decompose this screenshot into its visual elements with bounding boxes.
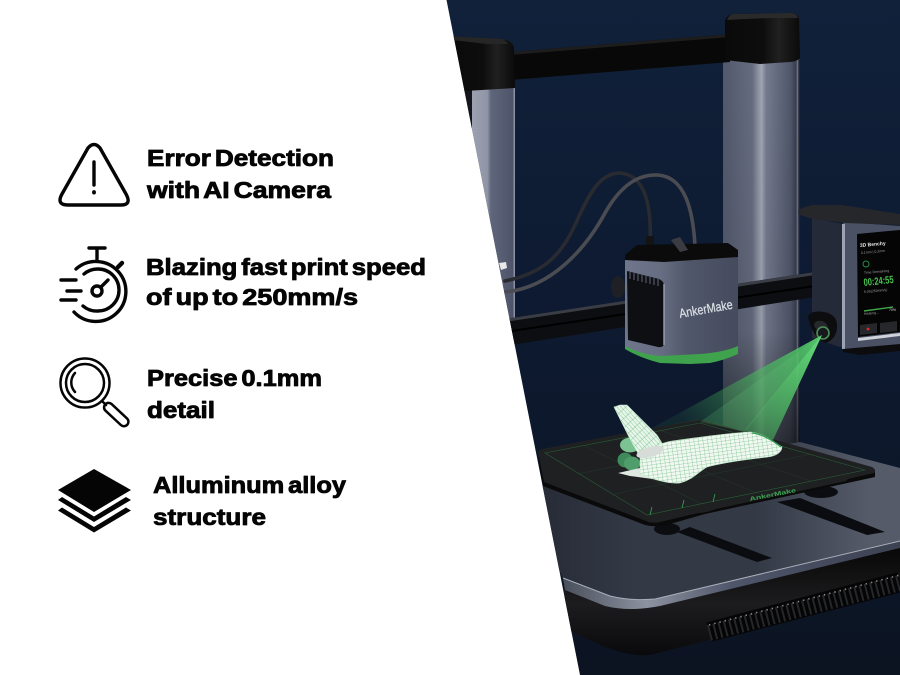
right frame pillar bbox=[723, 58, 800, 450]
display contents bbox=[860, 241, 896, 316]
touchscreen control unit bbox=[798, 205, 900, 355]
heading: aluminum structure: Alluminum alloy bbox=[153, 472, 346, 498]
grey body bbox=[625, 254, 738, 356]
icon: stopwatch bbox=[61, 248, 126, 321]
green bottom ring bbox=[625, 345, 738, 364]
rear slot bbox=[777, 498, 885, 535]
camera cables bbox=[505, 173, 695, 292]
display bbox=[857, 230, 900, 337]
build base bbox=[520, 442, 900, 655]
nozzle bbox=[635, 444, 665, 460]
black top bbox=[625, 243, 738, 262]
heading: precision: detail bbox=[147, 397, 215, 423]
heading: aluminum structure bbox=[153, 472, 346, 530]
screen bezel highlight bbox=[858, 333, 900, 341]
feature 3: precision bbox=[60, 358, 322, 428]
display contents: 70% bbox=[889, 308, 896, 312]
top frame crossbar bbox=[510, 34, 730, 80]
icon: warning triangle bbox=[60, 144, 128, 205]
top lid bbox=[798, 205, 900, 225]
heading: precision: Precise 0.1mm bbox=[147, 365, 322, 391]
pause button bbox=[880, 321, 897, 333]
icon: stacked layers bbox=[58, 469, 131, 532]
stop button bbox=[860, 323, 877, 335]
AnkerMake logo: AnkerMake bbox=[678, 297, 734, 321]
plate feet bbox=[654, 486, 838, 535]
front slot bbox=[677, 527, 772, 562]
heading: print speed: of up to 250mm/s bbox=[146, 284, 358, 310]
latch bbox=[671, 237, 688, 252]
right corner cap bbox=[725, 13, 800, 64]
icon: magnifying glass bbox=[60, 358, 130, 428]
heading: error detection: Error Detection bbox=[147, 145, 334, 171]
small white clip bbox=[499, 262, 507, 270]
display contents: 0.1mm | 0.2mm bbox=[861, 249, 885, 255]
base black side bbox=[563, 542, 900, 655]
product photo: AnkerMake 3D printer bbox=[440, 0, 900, 675]
feature 2: print speed bbox=[61, 248, 426, 321]
ventilation grille bbox=[709, 575, 900, 633]
heading: error detection bbox=[146, 145, 334, 203]
AI camera lens bbox=[808, 312, 837, 343]
side knob bbox=[611, 276, 625, 298]
base top surface bbox=[520, 442, 900, 600]
display contents: Heating... bbox=[864, 311, 879, 316]
heading: aluminum structure: structure bbox=[153, 504, 266, 530]
dark navy backdrop bbox=[440, 0, 900, 675]
print bed plate bbox=[538, 420, 875, 526]
dark side face bbox=[812, 218, 843, 348]
left frame pillar bbox=[460, 88, 515, 348]
print head camera unit bbox=[611, 237, 738, 364]
heading: print speed bbox=[146, 254, 426, 310]
horizontal gantry rail bbox=[505, 272, 815, 346]
base rim bbox=[563, 541, 900, 609]
heading: precision bbox=[147, 365, 322, 423]
left corner cap bbox=[450, 36, 515, 91]
display contents: 5.0h(250mm/s) bbox=[864, 288, 888, 294]
printed space shuttle model bbox=[614, 405, 782, 483]
feature 4: aluminum structure bbox=[58, 469, 346, 532]
plate surface bbox=[538, 420, 875, 523]
display contents: 3D Benchy bbox=[860, 241, 886, 249]
display contents: Time Remaining bbox=[864, 269, 889, 275]
plate edge bbox=[538, 458, 875, 526]
nose detail bbox=[752, 433, 781, 447]
green bed grid bbox=[545, 423, 865, 515]
front face bbox=[843, 222, 900, 350]
fuselage and wing bbox=[640, 432, 782, 483]
heatsink vent bbox=[627, 271, 664, 347]
heading: print speed: Blazing fast print speed bbox=[146, 254, 426, 280]
feature 1: error detection bbox=[60, 144, 334, 205]
engines bbox=[618, 438, 660, 480]
bed markings: AnkerMake bbox=[749, 488, 797, 503]
heading: error detection: with AI Camera bbox=[146, 177, 332, 203]
tail fin bbox=[614, 405, 665, 457]
green scanning light beam bbox=[652, 335, 822, 440]
base lip bbox=[843, 344, 900, 355]
